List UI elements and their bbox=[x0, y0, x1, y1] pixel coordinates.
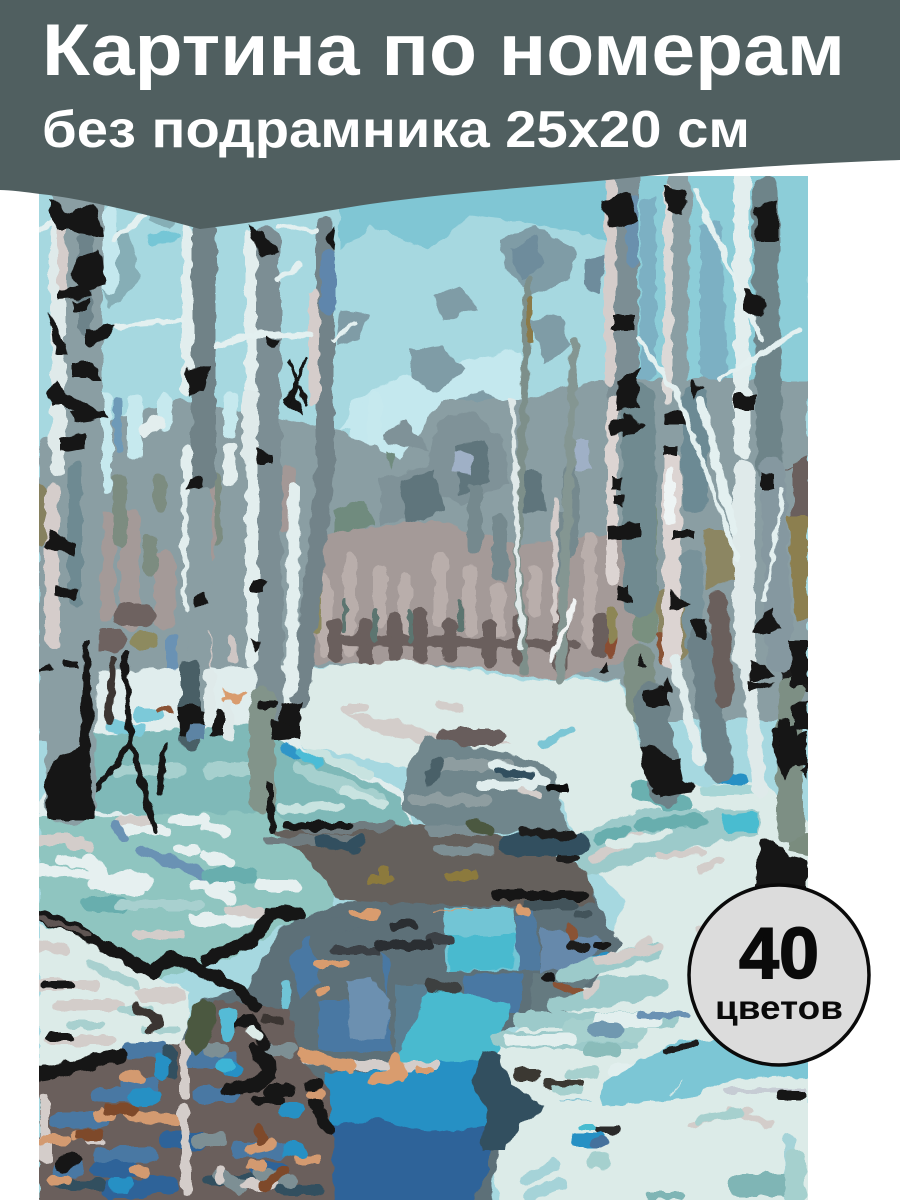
sky bbox=[102, 176, 808, 460]
forest base band bbox=[39, 380, 808, 745]
pale snow, far left bbox=[39, 925, 190, 1075]
badge number: 40 bbox=[739, 914, 819, 994]
lower trunk mottling bbox=[179, 675, 292, 817]
badge: 40 colours bbox=[689, 885, 869, 1065]
stream water bbox=[182, 891, 623, 1200]
reflection mound bbox=[405, 735, 570, 835]
bright blue pool bbox=[300, 1052, 580, 1200]
dark thicket, lower left bbox=[39, 1000, 335, 1200]
birch trunks bbox=[52, 170, 790, 830]
badge label: цветов bbox=[715, 989, 843, 1026]
title: Картина по номерам bbox=[42, 10, 845, 91]
white branches bbox=[40, 180, 800, 600]
right upper snow teal bbox=[575, 810, 808, 895]
black birch marks bbox=[35, 185, 808, 820]
reeds and mid-ground dabs bbox=[40, 455, 808, 710]
subtitle: без подрамника 25х20 см bbox=[42, 101, 750, 159]
dark stream banks bbox=[270, 825, 595, 915]
centre snow bbox=[295, 660, 810, 1200]
painting: winter birch forest bbox=[35, 170, 810, 1200]
header banner bbox=[0, 0, 900, 229]
teal snow, lower left bbox=[39, 812, 340, 985]
black branches bbox=[39, 650, 808, 1007]
left snow bbox=[39, 665, 413, 827]
right snow stripes bbox=[500, 930, 810, 1200]
